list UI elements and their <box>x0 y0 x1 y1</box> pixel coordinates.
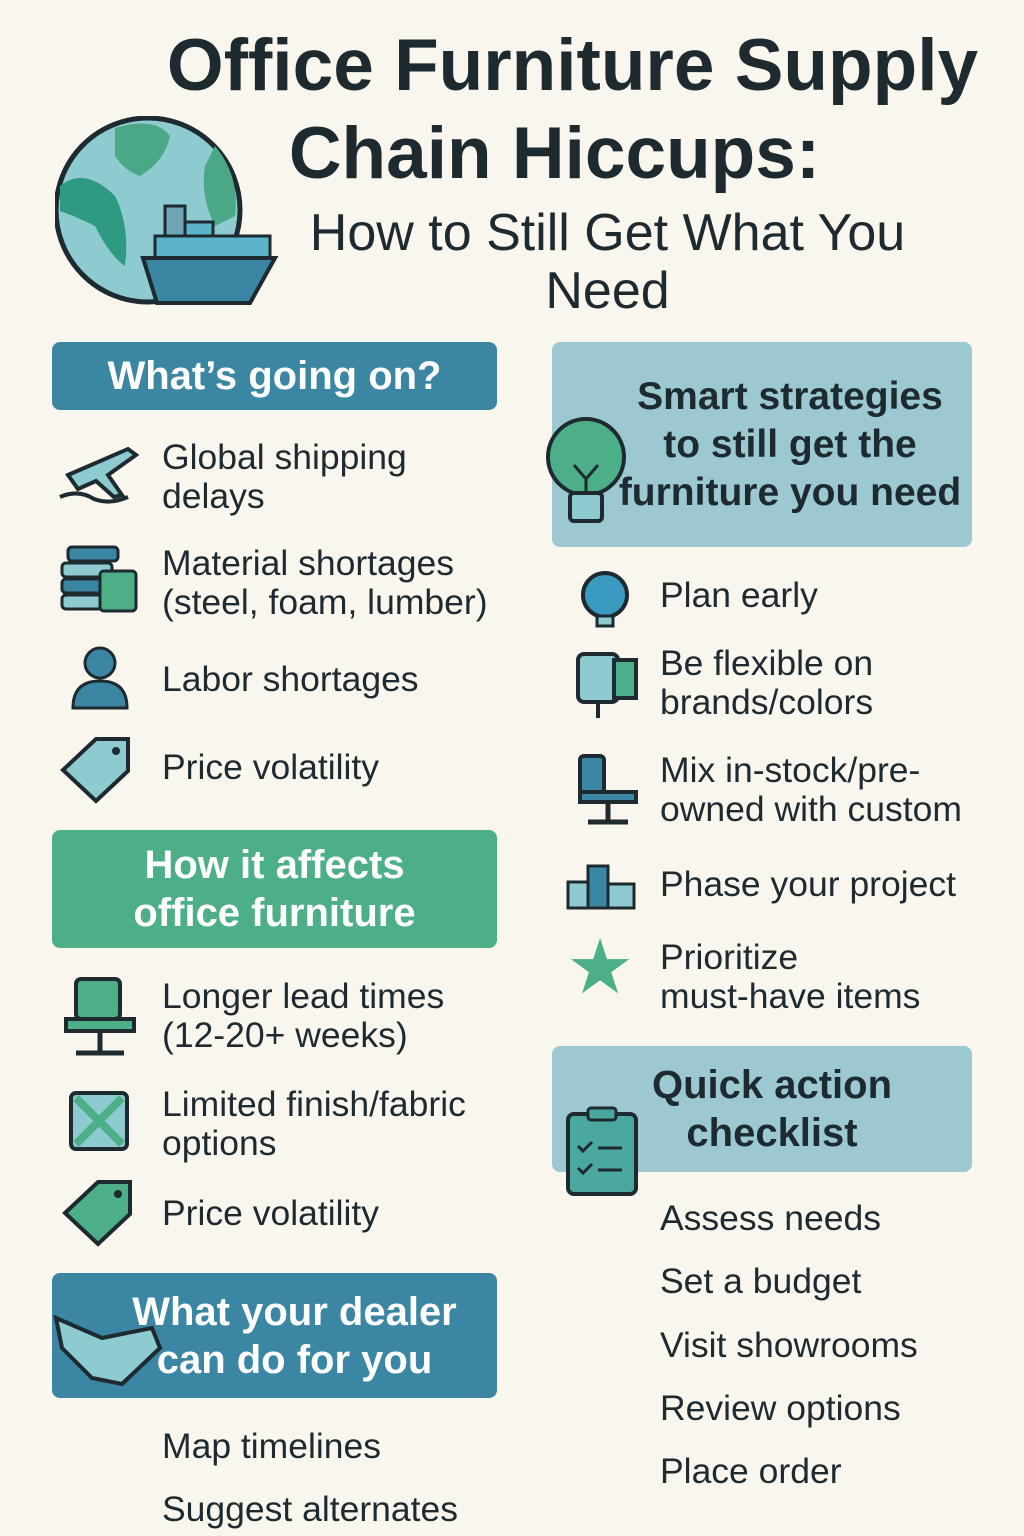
panel: dealer: can do for you <box>157 1338 432 1382</box>
panel: how it affects: office furniture <box>133 891 416 935</box>
subtitle <box>310 204 905 320</box>
text: prioritize: must-have items <box>660 976 920 1016</box>
icon: globe with ship <box>55 116 278 305</box>
text: flexible <box>660 643 873 722</box>
text: dealer items <box>162 1426 458 1529</box>
panel: dealer: What your dealer <box>132 1290 457 1334</box>
text: lead times: (12-20+ weeks) <box>162 1015 408 1055</box>
icon: blue dot <box>581 571 629 628</box>
icon: chair <box>64 977 136 1056</box>
panel: smart strategies: to still get the <box>663 422 917 466</box>
panel: smart strategies <box>552 342 972 547</box>
text: shipping: delays <box>162 476 265 516</box>
text: checklist items <box>660 1198 918 1491</box>
text: checklist items: Assess needs <box>660 1198 881 1238</box>
panel: how it affects: How it affects <box>144 843 405 887</box>
icon: handshake <box>53 1314 162 1386</box>
icon: price tag <box>60 737 130 804</box>
panel: smart strategies: furniture you need <box>619 470 961 514</box>
title: Office Furniture Supply <box>167 25 978 106</box>
text: mix: Mix in-stock/pre- <box>660 750 920 790</box>
text: dealer items: Map timelines <box>162 1426 381 1466</box>
subtitle: How to Still Get What You <box>310 204 905 262</box>
icon: fabric <box>69 1091 129 1151</box>
text: lead times: Longer lead times <box>162 976 444 1016</box>
icon: swatch chair <box>576 652 638 718</box>
icon: plane <box>59 446 140 504</box>
text: flexible: Be flexible on <box>660 643 873 683</box>
icon: bar chart <box>566 864 636 910</box>
icon: materials <box>60 546 138 612</box>
text: materials: Material shortages <box>162 543 454 583</box>
icon: green tag <box>62 1180 132 1247</box>
text: checklist items: Review options <box>660 1388 901 1428</box>
text: shipping: Global shipping <box>162 437 407 477</box>
text: checklist items: Set a budget <box>660 1261 861 1301</box>
panel: checklist: checklist <box>686 1111 858 1155</box>
text: flexible: brands/colors <box>660 682 873 722</box>
icon: star: ★ <box>566 925 634 1010</box>
text: phase: Phase your project <box>660 864 956 904</box>
panel: checklist <box>552 1046 972 1172</box>
panel: how it affects <box>52 830 497 948</box>
icon: clipboard <box>566 1106 638 1196</box>
text: materials: (steel, foam, lumber) <box>162 582 488 622</box>
text: mix: owned with custom <box>660 789 962 829</box>
text: mix <box>660 750 962 829</box>
text: materials <box>162 543 488 622</box>
text: price 2: Price volatility <box>162 1193 379 1233</box>
text: labor: Labor shortages <box>162 659 419 699</box>
icon: person <box>72 646 128 710</box>
panel: what's going on <box>52 342 497 410</box>
panel: dealer <box>52 1273 497 1398</box>
icon: office chair <box>578 754 638 824</box>
text: prioritize: Prioritize <box>660 937 798 977</box>
panel: checklist: Quick action <box>652 1063 892 1107</box>
text: price: Price volatility <box>162 747 379 787</box>
title: Chain Hiccups: <box>289 113 820 194</box>
text: prioritize <box>660 937 920 1016</box>
subtitle: Need <box>545 262 670 320</box>
icon: bulb <box>546 417 626 523</box>
text: finish: options <box>162 1123 276 1163</box>
panel: what's going on: What’s going on? <box>107 354 442 398</box>
text: checklist items: Visit showrooms <box>660 1325 918 1365</box>
text: dealer items: Suggest alternates <box>162 1489 458 1529</box>
text: finish <box>162 1084 466 1163</box>
text: checklist items: Place order <box>660 1451 842 1491</box>
text: plan early: Plan early <box>660 575 818 615</box>
text: finish: Limited finish/fabric <box>162 1084 466 1124</box>
text: shipping <box>162 437 407 516</box>
panel: smart strategies: Smart strategies <box>637 374 943 418</box>
text: lead times <box>162 976 444 1055</box>
title <box>167 25 978 194</box>
